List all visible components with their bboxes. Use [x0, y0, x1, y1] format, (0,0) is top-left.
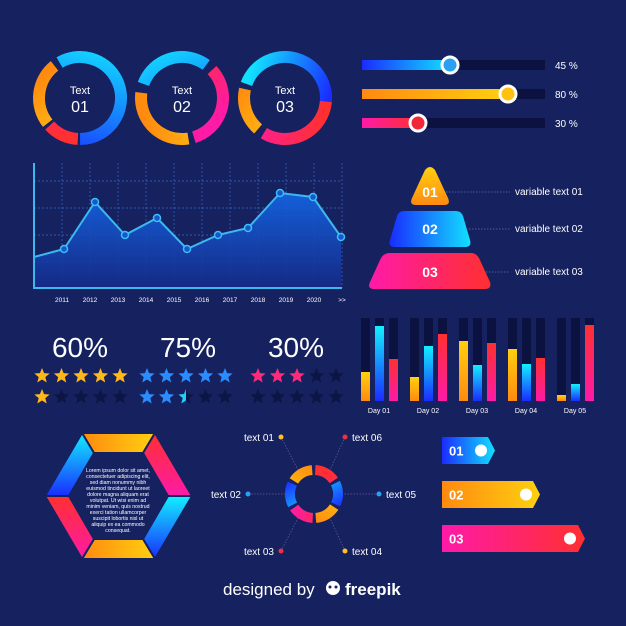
donut 1: 01: [71, 99, 89, 116]
donut 2: Text: [172, 85, 192, 97]
tags: 02: [449, 488, 463, 502]
bar chart: Day 02: [417, 408, 439, 415]
ring with labels: text 05: [386, 490, 416, 501]
rating 30%: 30%: [268, 332, 324, 363]
hexagon cycle: volutpat. Ut wisi enim ad: [90, 498, 146, 504]
donut 2: [124, 40, 240, 156]
pyramid: variable text 02: [515, 224, 583, 235]
tags: [442, 437, 585, 552]
ring with labels: text 04: [352, 547, 382, 558]
donut 1: [22, 40, 138, 156]
line chart: 2019: [279, 297, 294, 304]
rating 30%: [250, 332, 344, 403]
footer credit: freepik: [345, 580, 401, 599]
pyramid: variable text 03: [515, 267, 583, 278]
tags: 03: [449, 532, 463, 546]
line chart: [34, 163, 346, 304]
donut 3: [227, 40, 343, 156]
hexagon cycle: dolore magna aliquam erat: [87, 492, 149, 498]
pyramid: 03: [422, 264, 438, 280]
rating 75%: [139, 332, 233, 404]
rating 60%: [34, 332, 128, 403]
bar chart: Day 01: [368, 408, 390, 415]
pyramid: 01: [422, 184, 438, 200]
donut 3: 03: [276, 99, 294, 116]
hexagon cycle: euismod tincidunt ut laoreet: [86, 486, 150, 492]
bar chart: Day 05: [564, 408, 586, 415]
progress sliders: 30 %: [555, 119, 578, 130]
line chart: 2015: [167, 297, 182, 304]
line chart: 2018: [251, 297, 266, 304]
hexagon cycle: consequat.: [105, 528, 131, 534]
pyramid: variable text 01: [515, 187, 583, 198]
pyramid: [369, 167, 583, 289]
hexagon cycle: exerci tation ullamcorper: [90, 510, 147, 516]
hexagon cycle: minim veniam, quis nostrud: [86, 504, 150, 510]
hexagon cycle: [45, 433, 192, 559]
hexagon cycle: aliquip ex ea commodo: [91, 522, 145, 528]
progress sliders: [362, 57, 578, 131]
line chart: 2017: [223, 297, 238, 304]
ring with labels: text 01: [244, 433, 274, 444]
line chart: 2016: [195, 297, 210, 304]
ring with labels: text 06: [352, 433, 382, 444]
hexagon cycle: sed diam nonummy nibh: [90, 480, 146, 486]
donut 3: Text: [275, 85, 295, 97]
donut 1: Text: [70, 85, 90, 97]
progress sliders: 80 %: [555, 90, 578, 101]
pyramid: 02: [422, 221, 438, 237]
ring with labels: [211, 433, 416, 558]
line chart: 2013: [111, 297, 126, 304]
hexagon cycle: suscipit lobortis nisl ut: [93, 516, 144, 522]
donut 2: 02: [173, 99, 191, 116]
bar chart: Day 04: [515, 408, 537, 415]
line chart: >>: [338, 297, 346, 304]
tags: 01: [449, 444, 463, 458]
ring with labels: text 02: [211, 490, 241, 501]
line chart: 2020: [307, 297, 322, 304]
line chart: 2014: [139, 297, 154, 304]
hexagon cycle: Lorem ipsum dolor sit amet,: [86, 468, 150, 474]
bar chart: [361, 318, 594, 415]
ring with labels: text 03: [244, 547, 274, 558]
progress sliders: 45 %: [555, 61, 578, 72]
hexagon cycle: consectetuer adipiscing elit,: [86, 474, 150, 480]
footer credit: designed by: [223, 580, 315, 599]
rating 60%: 60%: [52, 332, 108, 363]
rating 75%: 75%: [160, 332, 216, 363]
line chart: 2012: [83, 297, 98, 304]
bar chart: Day 03: [466, 408, 488, 415]
line chart: 2011: [55, 297, 69, 304]
footer credit: [223, 580, 401, 599]
